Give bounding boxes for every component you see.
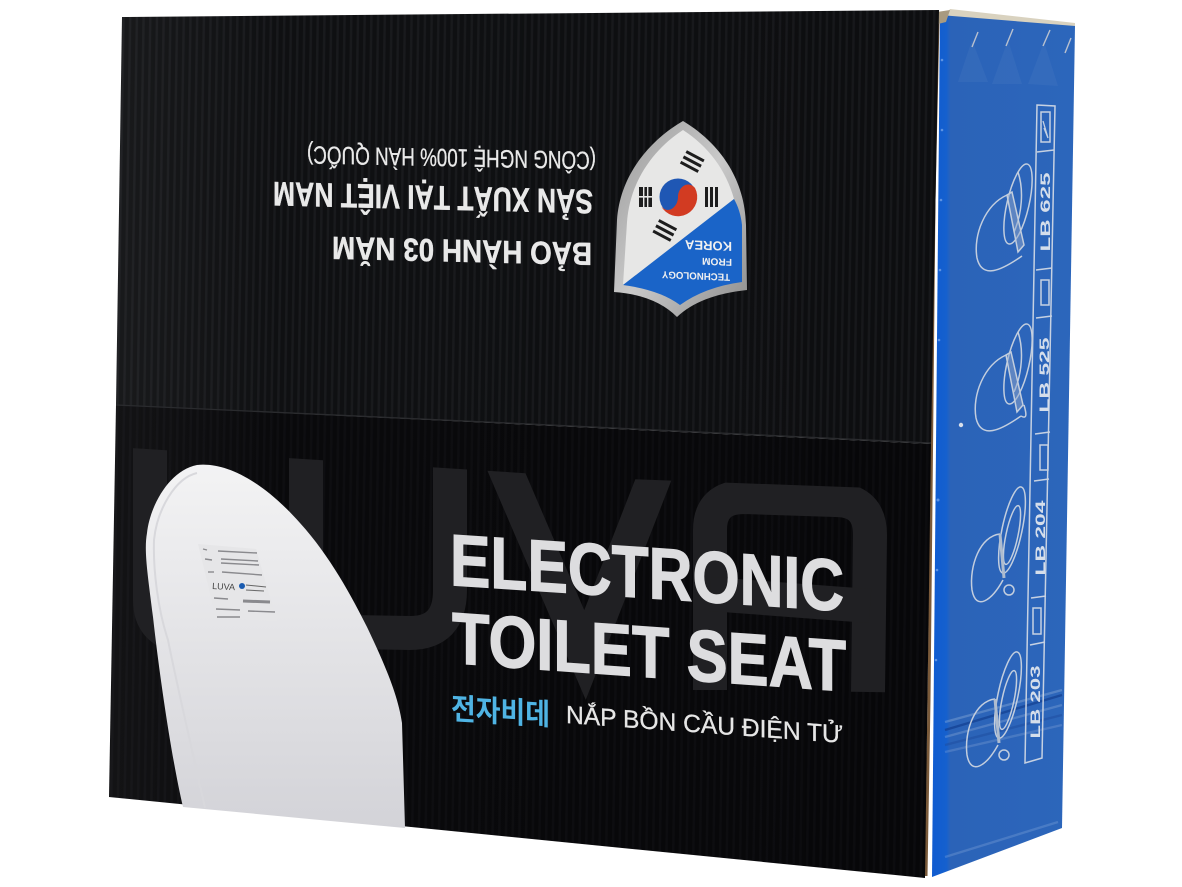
model labels: LB 204 bbox=[1032, 500, 1048, 576]
warranty line: BẢO HÀNH 03 NĂM bbox=[332, 230, 592, 272]
technology from Korea badge bbox=[614, 121, 747, 317]
taegeuk circle bbox=[660, 178, 697, 216]
box front upper flap bbox=[116, 10, 939, 444]
ghost LUVA logo bbox=[150, 440, 870, 692]
seat product sticker: LUVA bbox=[212, 581, 235, 592]
trigrams bbox=[639, 150, 718, 242]
box right side panel bbox=[932, 15, 1075, 877]
top flap creases bbox=[958, 40, 1058, 86]
badge text: KOREA bbox=[684, 237, 732, 254]
model labels: LB 203 bbox=[1027, 665, 1043, 738]
badge text: FROM bbox=[702, 255, 732, 267]
box front lower flap bbox=[109, 405, 931, 878]
badge text bbox=[662, 237, 732, 282]
model labels: LB 525 bbox=[1036, 337, 1052, 412]
made in Vietnam line: SẢN XUẤT TẠI VIỆT NAM bbox=[273, 174, 593, 220]
model labels: LB 625 bbox=[1037, 172, 1053, 252]
brown cardboard edge bbox=[926, 20, 938, 876]
TOILET SEAT: TOILET SEAT bbox=[452, 598, 846, 707]
side dots bbox=[935, 59, 943, 661]
box top edge bbox=[945, 9, 1075, 28]
toilet line drawing LB 204 bbox=[972, 485, 1031, 602]
warranty heading upside down bbox=[273, 140, 596, 272]
badge text: TECHNOLOGY bbox=[662, 268, 730, 282]
seat product sticker bbox=[198, 544, 277, 621]
model selection table bbox=[1025, 105, 1055, 763]
product title bbox=[450, 520, 846, 707]
Korean product name: 전자비데 bbox=[451, 684, 550, 734]
toilet line drawing LB 203 bbox=[967, 650, 1027, 767]
scuffed streaks bbox=[945, 690, 1062, 857]
box corner tear bbox=[937, 10, 950, 24]
flap seam bbox=[116, 405, 931, 443]
seat rim shading bbox=[154, 473, 205, 808]
toilet seat image bbox=[146, 465, 405, 828]
Korean technology line: (CÔNG NGHỆ 100% HÀN QUỐC) bbox=[307, 140, 596, 176]
toilet line drawing LB 525 bbox=[975, 322, 1038, 431]
ELECTRONIC: ELECTRONIC bbox=[450, 520, 844, 627]
front left haze bbox=[109, 10, 939, 878]
toilet line drawing LB 625 bbox=[976, 162, 1038, 271]
flap staples bbox=[972, 29, 1071, 53]
model labels bbox=[1027, 172, 1053, 739]
Vietnamese product name: NẮP BỒN CẦU ĐIỆN TỬ bbox=[566, 698, 843, 749]
